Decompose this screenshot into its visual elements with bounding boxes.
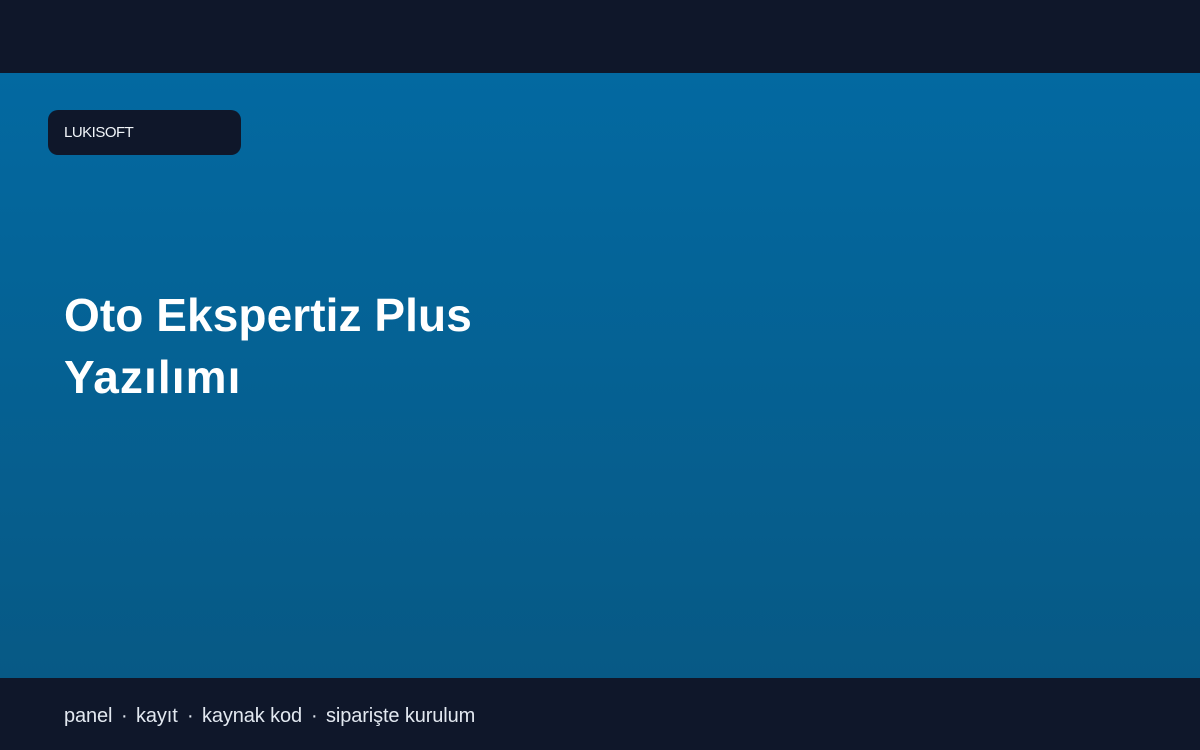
feature list: panel — [64, 705, 112, 727]
top bar — [0, 0, 1200, 73]
feature list: · — [121, 705, 128, 727]
brand name: LUKISOFT — [64, 124, 133, 141]
feature list: kaynak kod — [202, 705, 302, 727]
title: Oto Ekspertiz Plus — [64, 289, 472, 341]
feature list: siparişte kurulum — [326, 705, 475, 727]
feature list: kayıt — [136, 705, 178, 727]
feature list: · — [311, 705, 318, 727]
title — [64, 289, 472, 403]
brand badge — [48, 110, 241, 155]
feature list — [64, 705, 475, 727]
feature list: · — [187, 705, 194, 727]
title: Yazılımı — [64, 351, 242, 403]
bottom bar — [0, 678, 1200, 750]
